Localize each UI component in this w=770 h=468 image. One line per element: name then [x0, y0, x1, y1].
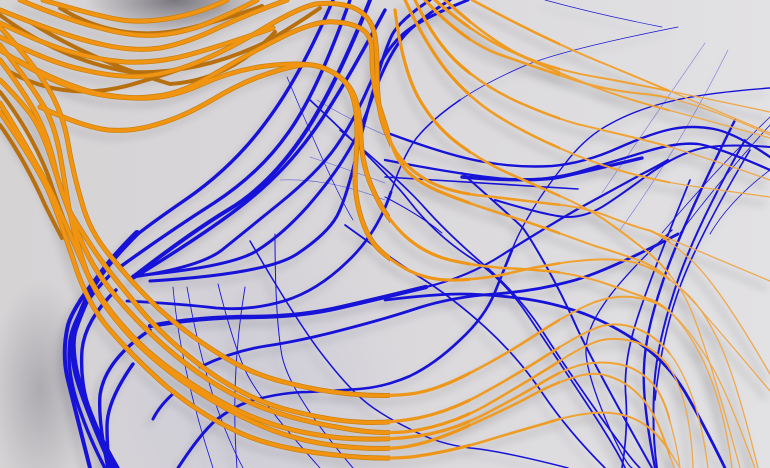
dark orange under-strands, top left	[0, 6, 320, 240]
background wall with soft shading	[0, 0, 356, 468]
